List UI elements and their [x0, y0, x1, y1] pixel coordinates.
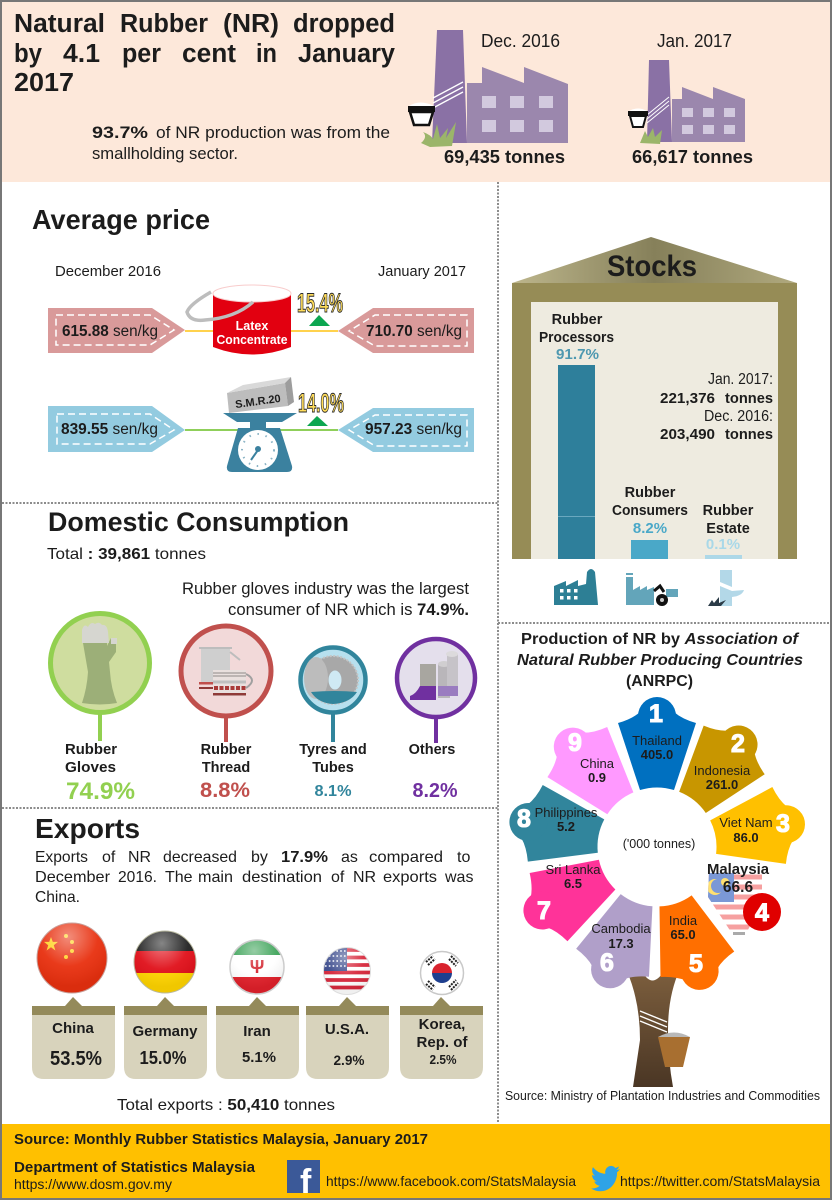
bar: rubber estate: 0.1% [706, 536, 740, 553]
price tag: latex January [338, 308, 474, 353]
facebook url: https://www.facebook.com/StatsMalaysia [326, 1173, 576, 1189]
icon: latex bucket: Latex [236, 319, 268, 333]
exports paragraph: The [165, 869, 193, 886]
petal: Thailand: 405.0 [641, 747, 673, 762]
bar: rubber estate: Estate [706, 521, 750, 537]
card: Korea [400, 997, 483, 1079]
price tag: latex December [48, 308, 185, 353]
item: rubber gloves: Gloves [65, 760, 116, 776]
petal: Viet Nam: Viet Nam [719, 815, 773, 830]
change: 14.0% up: 14.0% [298, 388, 344, 418]
card: China: 53.5% [50, 1048, 102, 1070]
department name: Department of Statistics Malaysia [14, 1159, 256, 1176]
item: tyres and tubes: Tubes [312, 760, 354, 776]
panel: exports [32, 813, 483, 1114]
icon: facebook [287, 1160, 320, 1200]
exports paragraph: 2016. [118, 869, 157, 886]
panel: average price [32, 204, 474, 472]
title: Rubber [120, 10, 208, 38]
panel: header [2, 2, 830, 182]
exports paragraph: NR [128, 849, 151, 866]
icon: scale with SMR 20 block: S.M.R.20 [234, 393, 282, 411]
warehouse shape [512, 237, 797, 559]
item: tyres and tubes [299, 648, 367, 800]
flag: Iran [228, 938, 286, 996]
exports paragraph: NR [353, 869, 376, 886]
card: Germany [124, 997, 207, 1079]
exports paragraph: as [341, 849, 358, 866]
icon: estate tree [708, 570, 744, 606]
smallholding note [92, 124, 390, 163]
icon: factory December [408, 30, 568, 147]
stock totals: 221,376 [660, 390, 715, 407]
label: Jan. 2017: Jan. 2017 [657, 30, 732, 51]
icon: scale with SMR 20 block [223, 377, 297, 472]
smallholding note: of NR production was from the [156, 124, 390, 142]
petal: Cambodia: 17.3 [608, 936, 634, 951]
title: per [122, 40, 161, 68]
card: Germany: 15.0% [140, 1048, 186, 1068]
title: by [14, 40, 43, 68]
exports paragraph: of [331, 869, 345, 886]
title: cent [182, 40, 237, 68]
unit label: ('000 tonnes) [623, 837, 695, 851]
card: China [32, 997, 115, 1079]
item: rubber thread: Rubber [201, 742, 252, 758]
price tag: SMR December: 839.55 sen/kg [61, 421, 158, 438]
icon: consumer factory with tyre [626, 573, 678, 606]
total exports: Total exports : 50,410 tonnes [117, 1097, 335, 1114]
exports paragraph: of [102, 849, 116, 866]
petal: Thailand [618, 697, 696, 790]
panel: stocks [512, 237, 797, 606]
label: 69,435 tonnes: 69,435 tonnes [444, 147, 565, 167]
change: 14.0% up [298, 388, 344, 426]
petal: Sri Lanka [507, 841, 626, 954]
exports paragraph: was [444, 869, 473, 886]
exports paragraph: Exports [35, 849, 88, 866]
largest consumer note [182, 580, 469, 619]
total consumption: Total : 39,861 tonnes [47, 546, 206, 563]
petal: Indonesia [662, 705, 781, 827]
stock totals: tonnes [725, 426, 773, 443]
panel: domestic consumption [47, 507, 475, 805]
heading: production by ANRPC: (ANRPC) [626, 673, 693, 690]
exports paragraph: main [198, 869, 233, 886]
petal: Philippines: 8 [517, 805, 531, 833]
petal: Philippines: Philippines [535, 805, 598, 820]
bar: rubber processors: 91.7% [556, 346, 599, 363]
exports paragraph: destination [242, 869, 322, 886]
panel: ANRPC production [502, 631, 820, 1103]
department website: https://www.dosm.gov.my [14, 1177, 172, 1192]
petal: China [531, 707, 650, 828]
petal: Viet Nam: 3 [776, 810, 790, 838]
petal: India: India [669, 913, 698, 928]
petal: Malaysia: Malaysia [707, 861, 770, 878]
item: tyres and tubes: 8.1% [314, 783, 352, 800]
bar: rubber processors [539, 312, 614, 559]
exports paragraph [35, 849, 473, 906]
petal: Sri Lanka: Sri Lanka [546, 862, 601, 877]
card: China: China [52, 1020, 94, 1037]
item: tyres and tubes: Tyres and [299, 742, 367, 758]
exports paragraph: China. [35, 889, 80, 906]
flag: Korea [420, 952, 464, 994]
heading: production by ANRPC [517, 631, 803, 690]
twitter url: https://twitter.com/StatsMalaysia [620, 1173, 820, 1189]
exports paragraph: to [457, 849, 470, 866]
title: 2017 [14, 69, 74, 97]
flag: USA [322, 947, 372, 995]
icon: latex bucket [187, 285, 291, 354]
price tag: SMR December [48, 406, 185, 452]
heading: average price: Average price [32, 204, 210, 235]
petal: Cambodia [567, 886, 673, 1001]
stock totals: Dec. 2016: [704, 408, 773, 425]
price tag: latex January: 710.70 sen/kg [366, 323, 462, 340]
card: Korea: Rep. of [416, 1034, 468, 1051]
bar: rubber processors: Processors [539, 330, 614, 346]
connector lines [185, 331, 338, 430]
item: rubber gloves: Rubber [65, 742, 117, 758]
title [14, 10, 396, 97]
smallholding note: smallholding sector. [92, 145, 238, 163]
label: 66,617 tonnes: 66,617 tonnes [632, 147, 753, 167]
stock totals: Jan. 2017: [708, 371, 773, 388]
petal: Cambodia: 6 [600, 949, 614, 977]
title: dropped [293, 10, 395, 38]
bar: rubber consumers: Rubber [625, 485, 676, 501]
bar: rubber consumers: Consumers [612, 503, 688, 519]
title: in [256, 40, 277, 68]
icon: twitter [591, 1166, 620, 1191]
card: USA: U.S.A. [325, 1021, 369, 1038]
item: rubber thread: 8.8% [200, 779, 250, 802]
price tag: latex December: 615.88 sen/kg [62, 323, 158, 340]
exports paragraph: exports [383, 869, 437, 886]
petal: Thailand: 1 [649, 700, 663, 728]
heading: production by ANRPC: Production of NR by Association of [521, 631, 800, 648]
petal: Sri Lanka: 6.5 [564, 876, 582, 891]
stock totals: tonnes [725, 390, 773, 407]
exports paragraph: 17.9% [281, 849, 328, 866]
card: Germany: Germany [132, 1023, 198, 1040]
card: USA [306, 997, 389, 1079]
petal: Sri Lanka: 7 [537, 897, 551, 925]
change: 15.4% up: 15.4% [297, 288, 343, 318]
icon: tree trunk [626, 969, 690, 1087]
largest consumer note: Rubber gloves industry was the largest [182, 580, 469, 598]
petal: Philippines [502, 780, 608, 874]
label: January 2017: January 2017 [378, 264, 466, 280]
card: Korea: Korea, [419, 1016, 465, 1033]
icon: latex bucket: Concentrate [216, 333, 288, 347]
bar: rubber estate: Rubber [703, 503, 754, 519]
item: others: Others [409, 742, 455, 758]
exports paragraph: compared [369, 849, 443, 866]
petal: Thailand: Thailand [632, 733, 682, 748]
change: 15.4% up [297, 288, 343, 326]
item: rubber thread: Thread [202, 760, 250, 776]
heading: exports: Exports [35, 813, 140, 844]
smallholding note: 93.7% [92, 124, 148, 142]
stock totals: 203,490 [660, 426, 715, 443]
card: Korea: 2.5% [430, 1053, 456, 1067]
card: Iran [216, 997, 299, 1079]
label: December 2016: December 2016 [55, 264, 161, 280]
title: 4.1 [63, 40, 100, 68]
petal: China: 9 [568, 729, 582, 757]
petal: Indonesia: Indonesia [694, 763, 751, 778]
petal: Philippines: 5.2 [557, 819, 575, 834]
petal: Malaysia: 4 [755, 899, 769, 927]
flag: Germany [134, 930, 196, 994]
item: rubber thread [181, 626, 271, 802]
bar: rubber consumers [612, 485, 688, 559]
title: January [298, 40, 396, 68]
stock totals [660, 371, 773, 443]
flag: China [37, 923, 107, 993]
exports paragraph: by [251, 849, 268, 866]
petal: Cambodia: Cambodia [591, 921, 651, 936]
icon: facebook: f [300, 1163, 312, 1200]
card: Iran: 5.1% [242, 1049, 276, 1066]
bar: rubber estate [703, 503, 754, 559]
footer source: Source: Monthly Rubber Statistics Malaysia, January 2017 [14, 1131, 428, 1148]
petal: Viet Nam [706, 783, 811, 876]
icon: processor factory [554, 569, 598, 605]
petal: India [639, 888, 743, 1002]
exports paragraph: decreased [163, 849, 237, 866]
petal: India: 65.0 [670, 927, 696, 942]
item: others [397, 639, 475, 802]
heading: stocks: Stocks [607, 250, 697, 283]
heading: domestic consumption: Domestic Consumption [48, 507, 349, 537]
petal: Viet Nam: 86.0 [733, 830, 759, 845]
title: Natural [14, 10, 105, 38]
item: rubber gloves: 74.9% [66, 778, 135, 805]
petal: China: 0.9 [588, 770, 606, 785]
title: (NR) [223, 10, 279, 38]
petal: Malaysia [708, 863, 781, 935]
card: Iran: Iran [243, 1023, 271, 1040]
source: ministry: Source: Ministry of Plantation Industries and Commodities [505, 1089, 820, 1103]
price tag: SMR January: 957.23 sen/kg [365, 421, 462, 438]
bar: rubber processors: Rubber [552, 312, 603, 328]
flag: Iran: Ψ [250, 957, 264, 977]
petal: India: 5 [689, 950, 703, 978]
heading: production by ANRPC: Natural Rubber Producing Countries [517, 652, 803, 669]
panel: footer [2, 1124, 830, 1200]
petal: China: China [580, 756, 615, 771]
largest consumer note: consumer of NR which is 74.9%. [228, 601, 469, 619]
bar: rubber consumers: 8.2% [633, 520, 667, 537]
exports paragraph: December [35, 869, 111, 886]
price tag: SMR January [338, 408, 474, 452]
petal: Malaysia: 66.6 [723, 879, 753, 896]
petal: Indonesia: 2 [731, 730, 745, 758]
card: USA: 2.9% [334, 1052, 365, 1068]
icon: factory January [628, 60, 745, 144]
label: Dec. 2016: Dec. 2016 [481, 30, 560, 51]
item: others: 8.2% [412, 780, 458, 802]
item: rubber gloves [50, 614, 150, 805]
petal: Indonesia: 261.0 [706, 777, 738, 792]
